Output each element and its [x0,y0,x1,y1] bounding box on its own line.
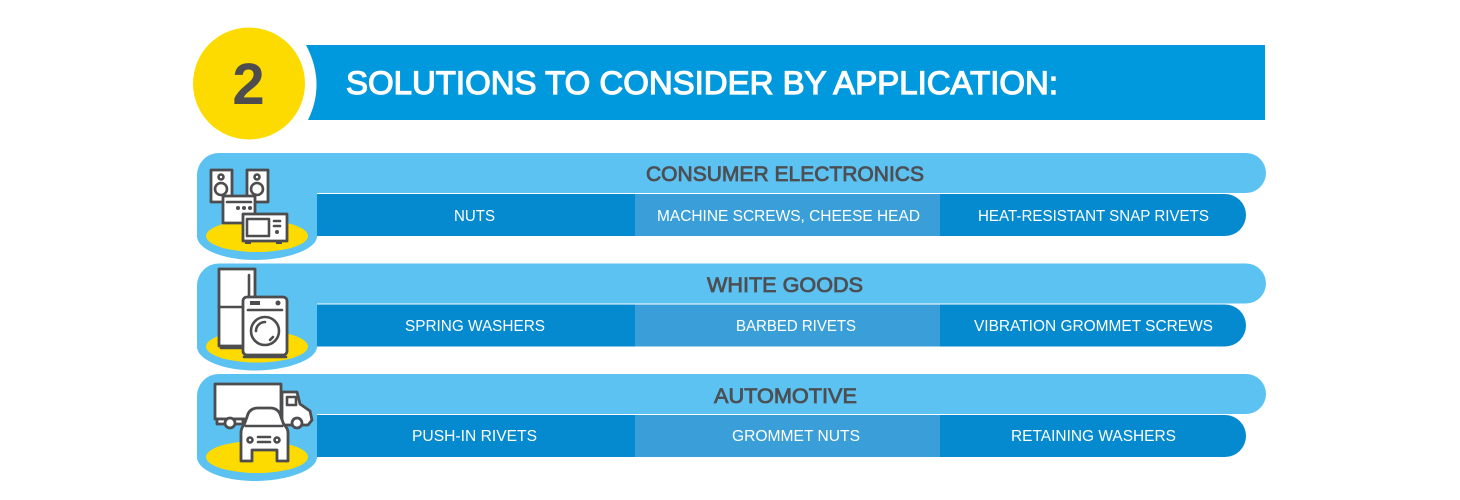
section number badge: 2 [232,52,265,117]
solutions row: MACHINE SCREWS, CHEESE HEAD [657,208,920,225]
icon: audio and kitchen electronics [206,170,308,252]
solutions row [317,304,1246,346]
solutions row [317,415,1246,457]
solutions row: HEAT-RESISTANT SNAP RIVETS [978,208,1209,225]
solutions row: NUTS [454,208,495,225]
solutions row: SPRING WASHERS [405,318,545,335]
panel background [197,264,1266,370]
solutions row: GROMMET NUTS [732,428,860,445]
solutions row: VIBRATION GROMMET SCREWS [974,318,1213,335]
panel: consumer electronics [197,153,1266,260]
section number badge [193,28,305,140]
solutions row: BARBED RIVETS [736,318,856,335]
panel: automotive [197,374,1266,481]
icon: truck and car [206,384,312,473]
icon: fridge and washing machine [206,269,308,362]
solutions row [317,194,1246,236]
title banner: SOLUTIONS TO CONSIDER BY APPLICATION: [346,65,1058,101]
panel: white goods [197,264,1266,370]
heading: automotive: AUTOMOTIVE [714,384,857,408]
heading: white goods: WHITE GOODS [707,273,863,297]
solutions row: PUSH-IN RIVETS [412,428,537,445]
panel background [197,374,1266,481]
panel background [197,153,1266,260]
heading: consumer electronics: CONSUMER ELECTRONICS [646,162,924,186]
title banner [306,45,1265,120]
solutions row: RETAINING WASHERS [1011,428,1176,445]
